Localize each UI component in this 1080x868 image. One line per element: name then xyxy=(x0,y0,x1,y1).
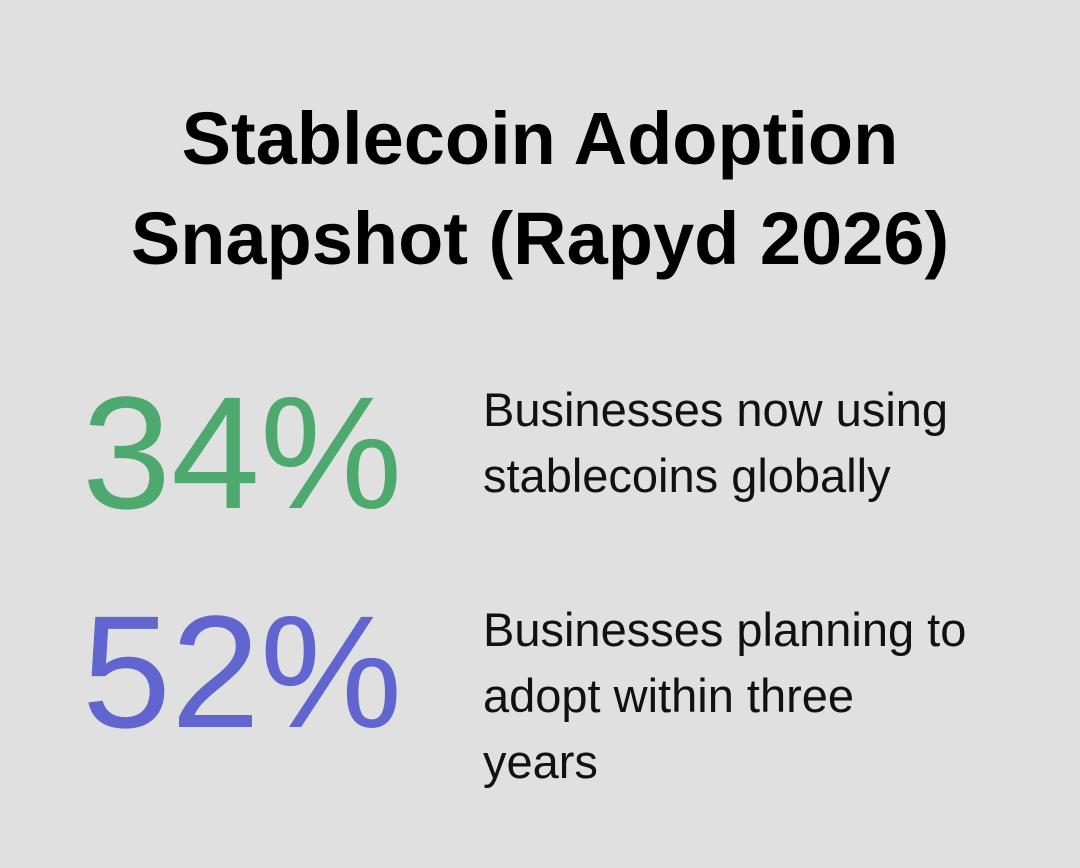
text: stat 1 description xyxy=(483,383,948,502)
title: Stablecoin Adoption xyxy=(182,97,898,180)
text: stat 2 description: years xyxy=(483,735,598,788)
text: stat 2 description xyxy=(483,603,966,788)
stat: 34%: 34% xyxy=(82,363,402,542)
title: Snapshot (Rapyd 2026) xyxy=(131,197,949,280)
text: stat 2 description: Businesses planning to xyxy=(483,603,966,656)
stat: 52%: 52% xyxy=(82,582,402,761)
text: stat 1 description: Businesses now using xyxy=(483,383,948,436)
title xyxy=(131,97,949,280)
text: stat 1 description: stablecoins globally xyxy=(483,449,891,502)
text: stat 2 description: adopt within three xyxy=(483,669,854,722)
